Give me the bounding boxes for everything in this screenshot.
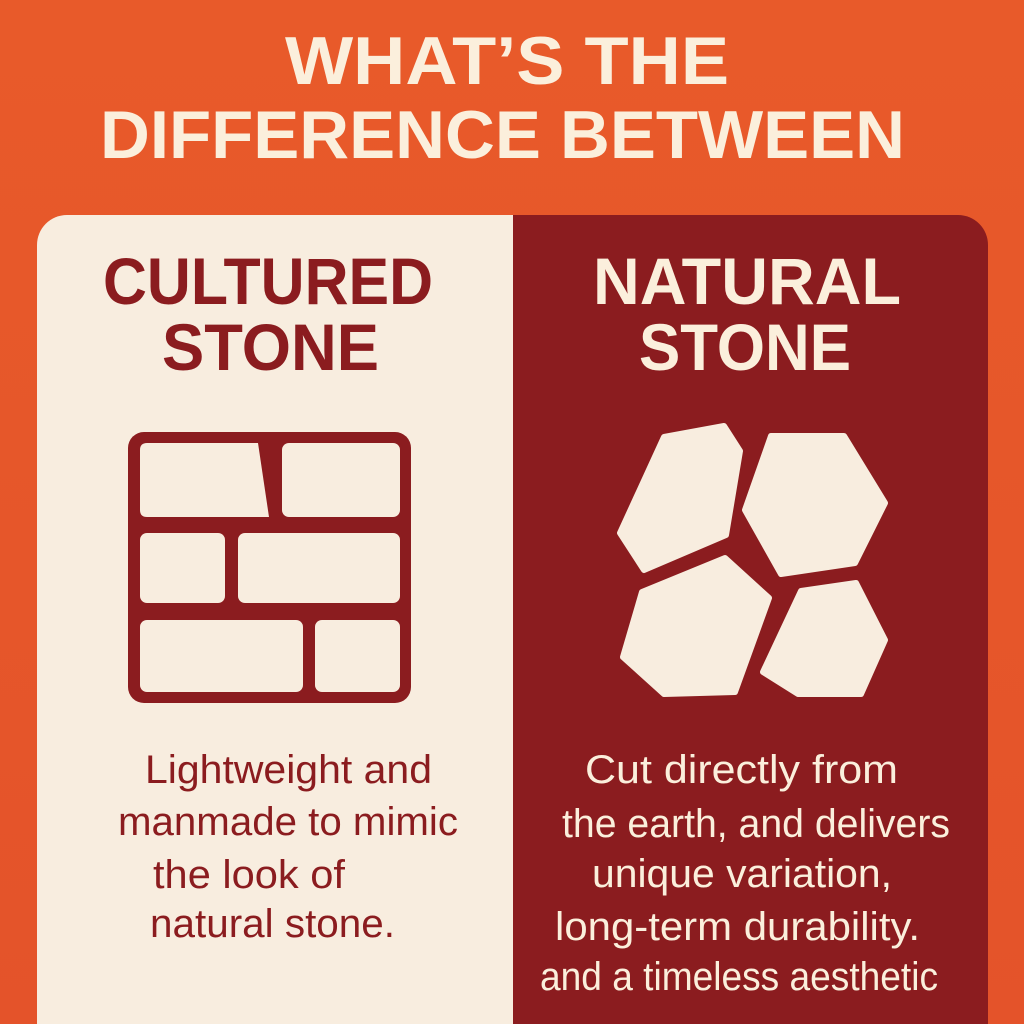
icon: natural stones: [620, 426, 885, 694]
text: natural description: Cut directly from: [585, 748, 898, 792]
text: cultured description: manmade to mimic: [118, 800, 458, 844]
heading: natural stone: STONE: [639, 310, 851, 384]
text: natural description: and a timeless aesthetic: [540, 955, 938, 999]
text: natural description: long-term durability.: [555, 905, 920, 949]
text: natural description: unique variation,: [592, 852, 892, 896]
text: cultured description: [118, 748, 458, 946]
heading: cultured stone: STONE: [162, 310, 379, 384]
panel: cultured stone: [37, 215, 513, 1024]
icon: brick wall: [128, 432, 411, 703]
title: [100, 23, 905, 173]
text: cultured description: Lightweight and: [145, 748, 432, 792]
text: cultured description: natural stone.: [150, 902, 395, 946]
panel: natural stone: [513, 215, 988, 1024]
text: natural description: the earth, and delivers: [562, 802, 950, 846]
heading: natural stone: NATURAL: [593, 244, 901, 318]
heading: cultured stone: CULTURED: [103, 244, 433, 318]
heading: natural stone: [597, 258, 900, 370]
text: natural description: [540, 748, 950, 999]
comparison card: [37, 215, 988, 1024]
title: DIFFERENCE BETWEEN: [100, 97, 905, 173]
heading: cultured stone: [106, 258, 430, 370]
title: WHAT’S THE: [285, 23, 729, 99]
text: cultured description: the look of: [153, 853, 346, 897]
